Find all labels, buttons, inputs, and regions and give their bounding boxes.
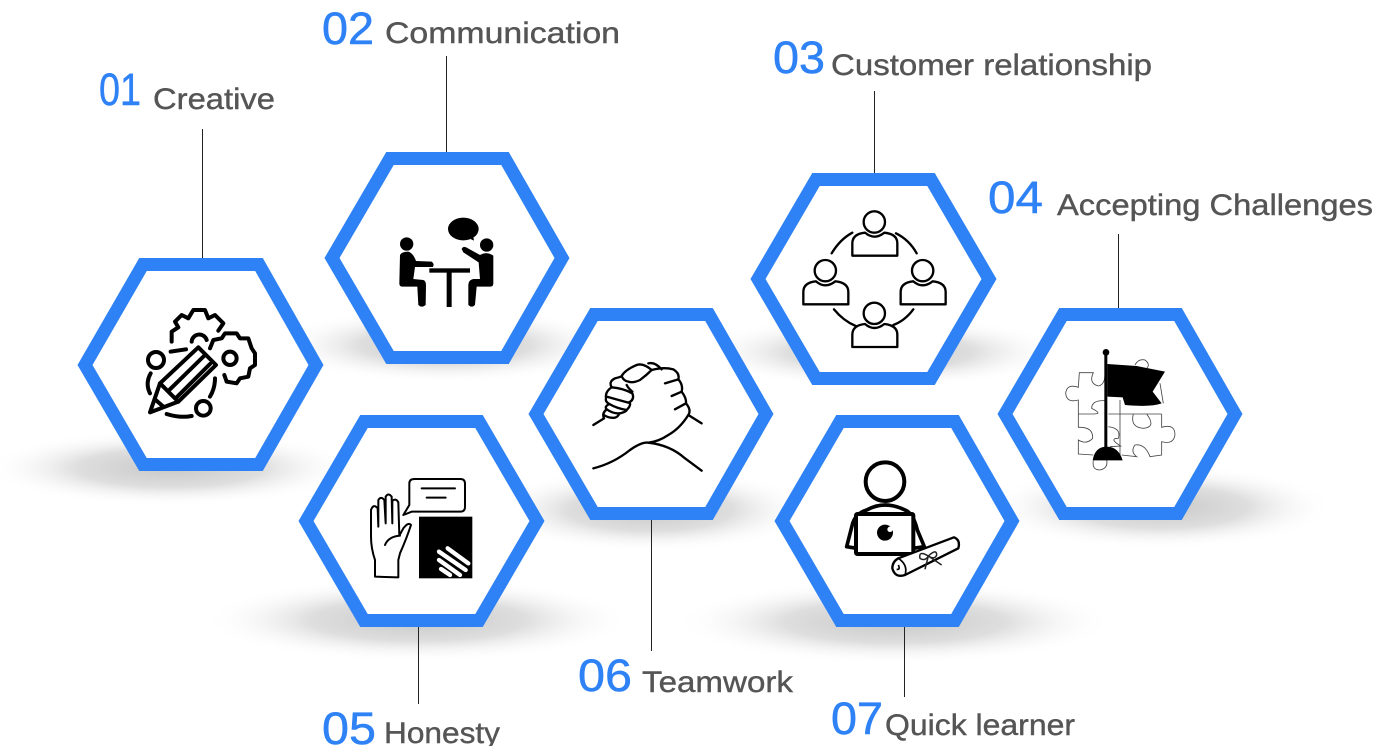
- hexagon 02: [332, 158, 562, 358]
- hexagon 07: [782, 422, 1012, 620]
- label 07 Quick learner: Quick learner: [885, 709, 1075, 742]
- hexagon 04: [1005, 314, 1235, 514]
- label 02 Communication: 02: [322, 3, 374, 54]
- label 03 Customer relationship: [773, 32, 1152, 83]
- label 06 Teamwork: [578, 650, 794, 701]
- label 01 Creative: Creative: [153, 83, 275, 116]
- icon: two people talking at a table: [399, 218, 493, 307]
- icon: circle of customers: [803, 211, 946, 347]
- connector lines: [202, 56, 1118, 704]
- icon: raised hand and oath: [371, 479, 472, 578]
- label 06 Teamwork: Teamwork: [642, 666, 794, 699]
- icon: gears and pencil: [148, 310, 255, 417]
- label 01 Creative: [99, 64, 275, 116]
- label 01 Creative: 01: [99, 64, 141, 115]
- icon: clasped hands: [593, 363, 702, 471]
- hexagon 01: [85, 264, 316, 464]
- label 05 Honesty: [322, 703, 500, 746]
- hexagon 05: [306, 422, 537, 620]
- label 02 Communication: [322, 3, 620, 54]
- icon: learner with laptop and diploma: [847, 462, 959, 576]
- label 03 Customer relationship: Customer relationship: [831, 49, 1152, 82]
- drop shadows: [0, 307, 1335, 664]
- label 07 Quick learner: 07: [831, 693, 883, 744]
- label 02 Communication: Communication: [385, 17, 620, 50]
- hexagon 03: [758, 180, 989, 378]
- label 04 Accepting Challenges: [988, 172, 1373, 223]
- label 06 Teamwork: 06: [578, 650, 632, 701]
- label 04 Accepting Challenges: 04: [988, 172, 1043, 223]
- hexagon 06: [536, 314, 766, 514]
- label 04 Accepting Challenges: Accepting Challenges: [1057, 189, 1373, 222]
- label 07 Quick learner: [831, 693, 1075, 744]
- label 03 Customer relationship: 03: [773, 32, 825, 83]
- icon: flag on puzzle: [1066, 349, 1175, 470]
